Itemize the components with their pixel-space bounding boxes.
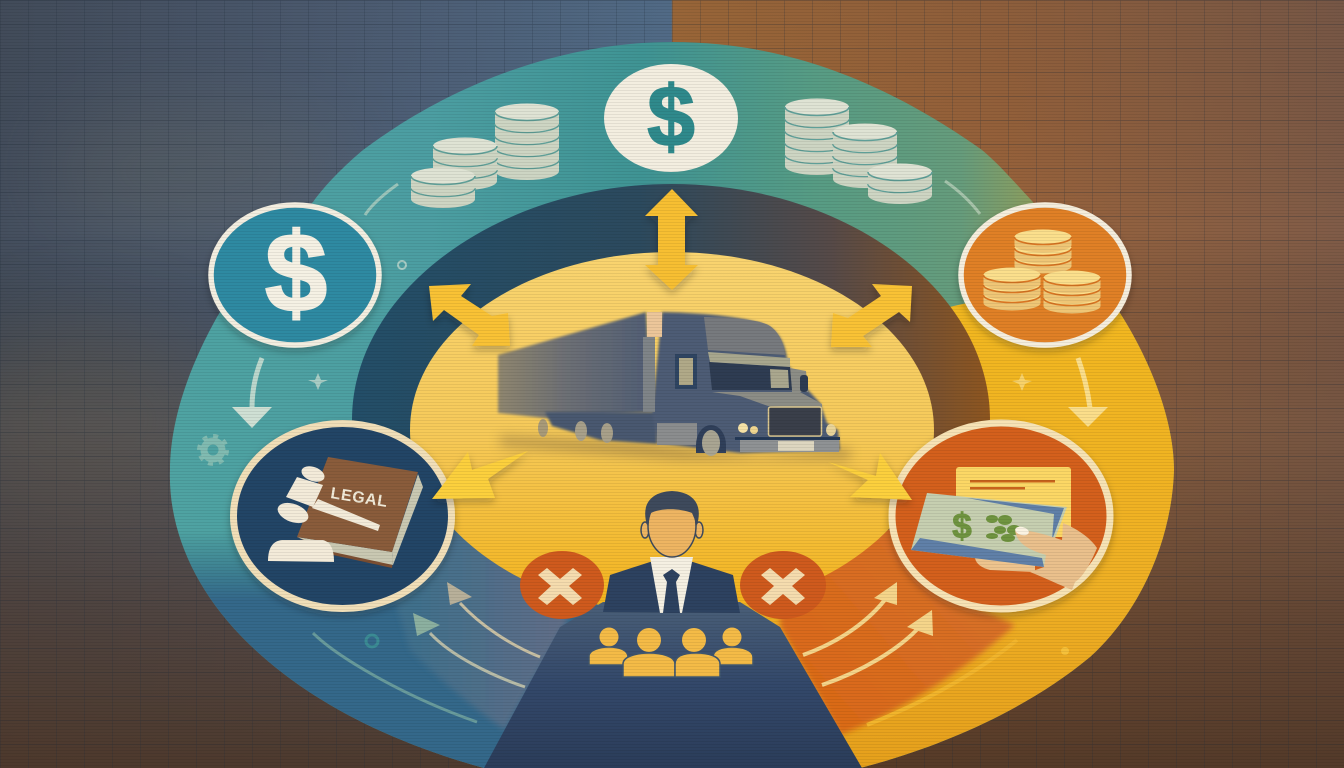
curved arrows: lower right: [803, 582, 1017, 725]
icon: left cross: [520, 551, 604, 619]
arrow: right down: [1068, 358, 1108, 427]
icon: right coins circle: [961, 205, 1129, 345]
tie: [663, 569, 680, 613]
book: [297, 457, 423, 568]
face: [648, 495, 696, 557]
dark middle ring: [352, 184, 990, 600]
banknote: [911, 493, 1067, 567]
rear wheels: [601, 423, 613, 443]
lower fingers: [975, 558, 1035, 572]
outer ring: [170, 42, 1174, 768]
arrow: upper left double: [429, 284, 510, 346]
bumper: [735, 437, 840, 440]
icon: top dollar circle: $: [647, 69, 695, 165]
banknote: $: [952, 507, 972, 546]
lower blue band: [181, 540, 598, 768]
icon: left dollar circle: $: [265, 210, 327, 335]
coins: upper right stacks: [785, 98, 932, 204]
arrow: top double: [645, 189, 698, 290]
bottom dark trapezoid: [484, 602, 862, 768]
front wheel: [696, 425, 726, 453]
hood side box: [790, 368, 808, 392]
lower right wedge: [780, 510, 1015, 735]
hand: [1015, 523, 1097, 590]
mirror: [800, 375, 808, 392]
arcs on the teal band: [365, 181, 980, 215]
teal band: [170, 42, 1174, 768]
icon: team members: [589, 628, 753, 677]
invoice: [956, 467, 1071, 537]
coins: upper left stacks: [411, 104, 559, 208]
lower left wedge: [395, 510, 568, 730]
cab roof shade: [704, 317, 785, 355]
arrow: lower right: [828, 453, 912, 500]
road shadow: [500, 436, 850, 460]
amber band: [744, 304, 1174, 768]
visor: [708, 352, 790, 367]
arrow: lower left: [432, 451, 528, 499]
icon: gear: [199, 436, 227, 464]
lights: [738, 423, 748, 433]
curved arrows: lower left: [313, 582, 540, 722]
icon: top dollar circle: [604, 64, 738, 172]
icon: legal circle: [234, 424, 452, 608]
undercarriage: [545, 412, 657, 444]
icon: left dollar circle: [211, 205, 379, 345]
icon: payment circle: [892, 423, 1110, 609]
suit: [603, 562, 740, 613]
inner yellow core: [410, 252, 934, 605]
trailer light strips: [647, 312, 662, 337]
hair: [645, 491, 699, 525]
person: [603, 491, 740, 613]
label: LEGAL: LEGAL: [329, 485, 389, 511]
fingernail: [1014, 525, 1030, 537]
trailer: [498, 312, 652, 418]
icon: right cross: [740, 551, 826, 619]
cab: [652, 312, 840, 453]
cab lower panel: [657, 423, 697, 445]
side window: [675, 354, 697, 389]
decorative marks: [308, 261, 1069, 655]
cab hood: [712, 392, 822, 408]
truck: [498, 312, 850, 460]
ears: [641, 522, 649, 538]
arrow: left down: [232, 358, 272, 428]
grille: [768, 407, 822, 436]
shirt: [650, 557, 693, 613]
arrow: upper right double: [831, 284, 912, 347]
gavel: [268, 463, 380, 562]
windshield: [709, 362, 792, 390]
